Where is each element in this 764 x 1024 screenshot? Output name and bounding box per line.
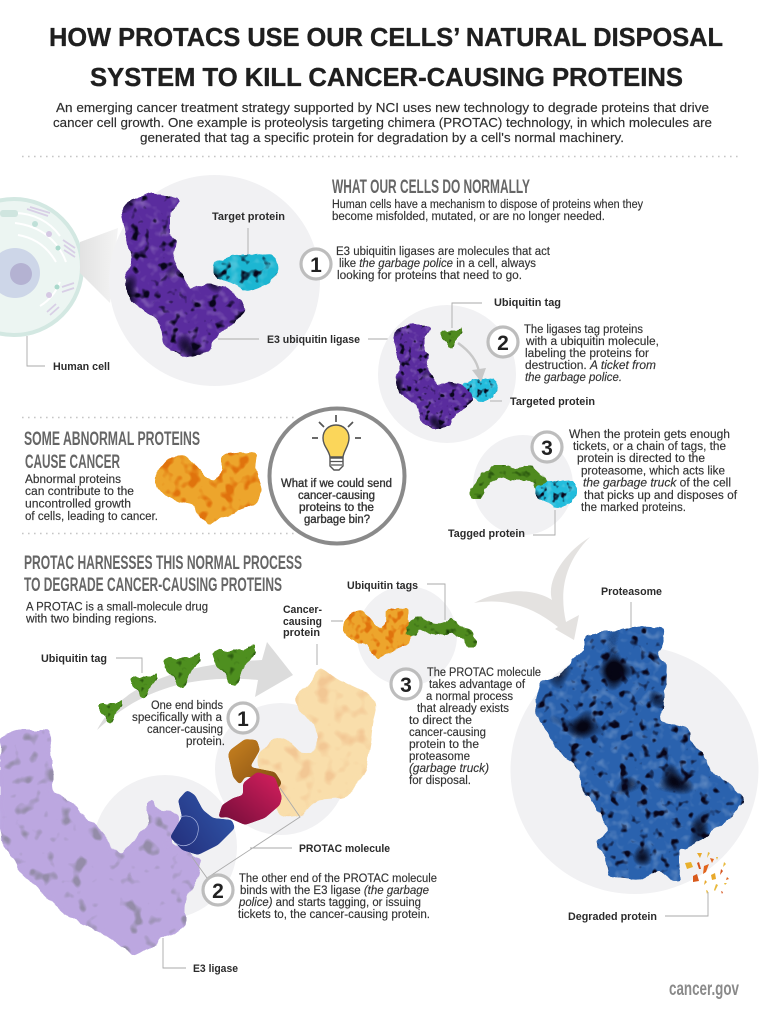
label: degraded protein [568, 892, 708, 923]
step 3 text: proteasome, which acts like [581, 466, 725, 478]
callout text: cancer-causing [298, 490, 375, 502]
heading: protac harnesses: TO DEGRADE CANCER-CAUSING PROTEINS [24, 574, 282, 596]
callout text: garbage bin? [304, 514, 370, 526]
step 1 text: looking for proteins that need to go. [337, 270, 522, 282]
icon: E3 ubiquitin ligase [121, 192, 245, 358]
step 3 bottom text: takes advantage of [429, 679, 526, 691]
step 2 text: destruction. A ticket from [525, 360, 656, 372]
step 3 bottom text: for disposal. [409, 775, 471, 787]
label: ubiquitin tag left: Ubiquitin tag [41, 653, 107, 665]
label: cancer-causing protein: protein [283, 627, 320, 639]
icon: cancer-causing protein [156, 452, 262, 525]
background circles [215, 703, 347, 835]
step 2 text: the garbage police. [525, 372, 622, 384]
step 3 bottom text: (garbage truck) [409, 763, 489, 775]
step 3 number: 3 [541, 437, 553, 460]
label: human cell: Human cell [53, 361, 110, 373]
icon: ubiquitin chain small [411, 621, 471, 643]
label: ubiquitin tag [452, 297, 561, 328]
label: cancer-causing protein: Cancer- [283, 604, 322, 616]
label: E3 ligase: E3 ligase [193, 963, 238, 975]
step 3 text: the garbage truck of the cell [583, 478, 731, 490]
text: protac definition: with two binding regions. [25, 614, 157, 626]
heading: protac harnesses [24, 552, 302, 596]
text: normal mechanism: become misfolded, mutated, or are no longer needed. [332, 211, 605, 223]
step 1 bottom text: protein. [186, 736, 225, 748]
icon: targeted protein [462, 378, 498, 403]
step 3 bottom text: cancer-causing [409, 727, 486, 739]
callout text: What if we could send [281, 478, 392, 490]
panel: tagged cancer protein [344, 586, 471, 686]
icon: pale E3 ligase [0, 730, 203, 957]
step 2 bottom text: binds with the E3 ligase (the garbage [240, 885, 429, 897]
step 3 text: tickets, or a chain of tags, the [573, 441, 726, 453]
step 1 number bottom: 1 [237, 708, 249, 731]
step 1 text: like the garbage police in a cell, always [339, 258, 536, 270]
label: proteasome [601, 586, 662, 628]
title [49, 24, 723, 92]
step 1 number [301, 249, 331, 279]
step 1 number: 1 [310, 254, 322, 277]
step 3 text [569, 429, 738, 514]
label: ubiquitin tags: Ubiquitin tags [347, 580, 418, 592]
step 2 bottom text: police) and starts tagging, or issuing [238, 897, 421, 909]
icon: light bulb [312, 415, 361, 470]
step 1 bottom text: One end binds [151, 700, 223, 712]
step 3 bottom text: to direct the [409, 715, 472, 727]
label: E3 ligase [163, 938, 238, 975]
text: protac definition: A PROTAC is a small-molecule drug [26, 602, 208, 614]
step 1 text: E3 ubiquitin ligases are molecules that act [336, 246, 551, 258]
icon group: ubiquitin tags row [98, 642, 255, 724]
icon: proteasome [534, 626, 744, 883]
icon: pale cancer-causing protein [257, 667, 378, 818]
panel: tagged protein circle [473, 435, 578, 535]
icon: PROTAC molecule [170, 739, 282, 855]
step 2 text: The ligases tag proteins [524, 324, 643, 336]
intro text: generated that tag a specific protein for degradation by a cell's normal machinery. [140, 131, 624, 145]
label: human cell [27, 336, 110, 373]
label: target protein: Target protein [212, 211, 285, 223]
step 3 bottom text [409, 667, 541, 787]
icon: target protein [213, 253, 279, 292]
step 1 bottom text: specifically with a [132, 712, 223, 724]
step 3 number [532, 432, 562, 462]
label: cancer-causing protein: causing [283, 616, 322, 628]
label: proteasome: Proteasome [601, 586, 662, 598]
label: tagged protein: Tagged protein [448, 528, 525, 540]
icon: small E3 ligase [393, 323, 473, 430]
label: ubiquitin tags [347, 580, 445, 620]
callout: garbage bin question [270, 408, 404, 544]
label: targeted protein: Targeted protein [510, 396, 595, 408]
step 3 text: the marked proteins. [581, 502, 686, 514]
text: abnormal proteins: uncontrolled growth [25, 498, 131, 510]
heading: some abnormal proteins: SOME ABNORMAL PROTEINS [24, 428, 200, 450]
text: normal mechanism: Human cells have a mechanism to dispose of proteins when they [332, 199, 643, 211]
label: ubiquitin tag left [41, 653, 142, 673]
label: degraded protein: Degraded protein [568, 911, 657, 923]
icon: orange protein small [344, 608, 412, 659]
label: protac molecule [250, 843, 390, 855]
text: abnormal proteins: of cells, leading to cancer. [25, 511, 158, 523]
icon: degraded protein fragments [685, 852, 729, 894]
callout text [281, 478, 392, 526]
label: tagged protein [448, 510, 555, 540]
step 2 number: 2 [497, 332, 509, 355]
label: ubiquitin tag: Ubiquitin tag [494, 297, 561, 309]
step 3 text: When the protein gets enough [569, 429, 730, 441]
title: SYSTEM TO KILL CANCER-CAUSING PROTEINS [90, 64, 683, 92]
title: HOW PROTACS USE OUR CELLS’ NATURAL DISPOSAL [49, 24, 723, 52]
step 1 bottom text: cancer-causing [147, 724, 223, 736]
label: E3 ubiquitin ligase: E3 ubiquitin ligase [267, 334, 360, 346]
step 3 bottom text: proteasome [409, 751, 470, 763]
step 1 text [336, 246, 551, 282]
panel: proteasome [510, 626, 758, 894]
text: abnormal proteins: Abnormal proteins [25, 474, 121, 486]
step 2 text: with a ubiquitin molecule, [525, 336, 659, 348]
step 1 bottom text [132, 700, 225, 748]
step 2 bottom text: The other end of the PROTAC molecule [239, 873, 437, 885]
arrow: tag to protein [458, 343, 486, 382]
step 2 number [488, 327, 518, 357]
step 2 bottom text [238, 873, 437, 921]
intro text [53, 101, 712, 145]
step 1 number bottom [228, 703, 258, 733]
icon: ubiquitin tag [440, 327, 462, 349]
step 2 number bottom: 2 [212, 880, 224, 903]
step 3 bottom text: The PROTAC molecule [427, 667, 541, 679]
icon: human cell [0, 199, 82, 335]
callout text: proteins to the [299, 502, 374, 514]
icon: tagged cyan protein [535, 480, 578, 509]
heading: what our cells do normally: WHAT OUR CELLS DO NORMALLY [332, 176, 530, 198]
arrow: curved to proteasome [474, 537, 590, 640]
step 3 text: that picks up and disposes of [584, 490, 738, 502]
label: protac molecule: PROTAC molecule [299, 843, 390, 855]
step 3 text: protein is directed to the [577, 453, 705, 465]
step 2 number bottom [203, 875, 233, 905]
text: abnormal proteins: can contribute to the [25, 486, 134, 498]
panel: E3 and target circle [109, 175, 320, 386]
text: normal mechanism [332, 199, 643, 223]
step 3 bottom text: that already exists [417, 703, 509, 715]
panel: tagging circle [378, 305, 516, 443]
text: protac definition [25, 602, 208, 626]
heading: protac harnesses: PROTAC HARNESSES THIS NORMAL PROCESS [24, 552, 302, 574]
icon: ubiquitin chain [476, 470, 543, 494]
heading: some abnormal proteins [24, 428, 200, 473]
callout lines [192, 788, 300, 878]
intro text: An emerging cancer treatment strategy supported by NCI uses new technology to degrade proteins that drive [56, 101, 709, 115]
arrow: big gray curved [97, 642, 293, 730]
label: cancer-causing protein [283, 604, 343, 665]
step 3 number bottom: 3 [400, 674, 412, 697]
step 3 number bottom [391, 669, 421, 699]
magnifier cone [80, 228, 118, 303]
label: target protein [212, 211, 285, 254]
step 2 bottom text: tickets to, the cancer-causing protein. [238, 909, 430, 921]
step 2 text [524, 324, 659, 384]
step 3 bottom text: protein to the [409, 739, 479, 751]
heading: some abnormal proteins: CAUSE CANCER [25, 451, 120, 473]
intro text: cancer cell growth. One example is proteolysis targeting chimera (PROTAC) technology, in which molecules are [53, 116, 712, 130]
text: abnormal proteins [25, 474, 158, 523]
step 3 bottom text: a normal process [426, 691, 513, 703]
step 2 text: labeling the proteins for [525, 348, 649, 360]
